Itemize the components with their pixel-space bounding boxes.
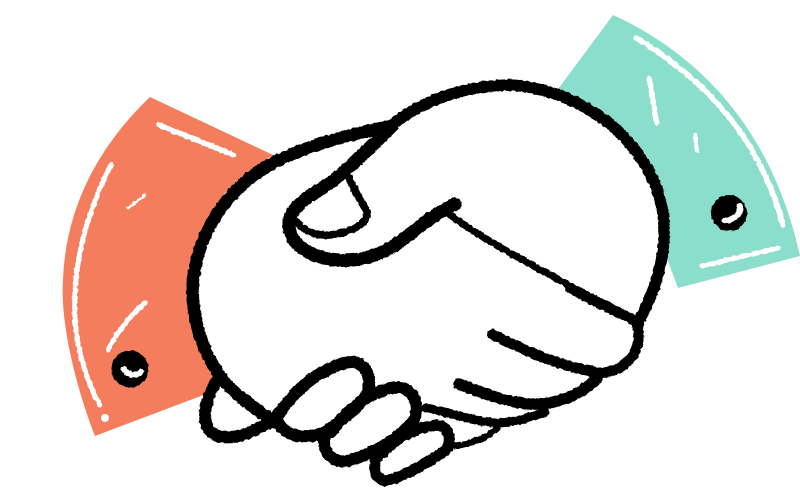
white hand fill	[190, 84, 665, 478]
panel: coral left sleeve	[63, 97, 290, 436]
upper hand outline	[392, 85, 664, 325]
sleeve highlights	[75, 125, 234, 405]
finger 2	[324, 387, 416, 461]
teal sleeve button	[711, 195, 747, 231]
finger 1	[274, 362, 369, 437]
left hand outline and cuff	[193, 126, 392, 422]
coral sleeve button	[112, 350, 148, 388]
thumb	[289, 126, 455, 260]
hand outline	[193, 85, 664, 481]
thumb nail	[297, 172, 367, 235]
panel: teal right sleeve	[550, 15, 800, 288]
little finger loop	[205, 382, 274, 437]
right fingers curve	[492, 328, 639, 373]
finger division line	[450, 215, 637, 322]
sleeve highlights	[636, 38, 783, 266]
finger 3	[375, 425, 449, 481]
sleeve highlight dot	[101, 414, 109, 422]
